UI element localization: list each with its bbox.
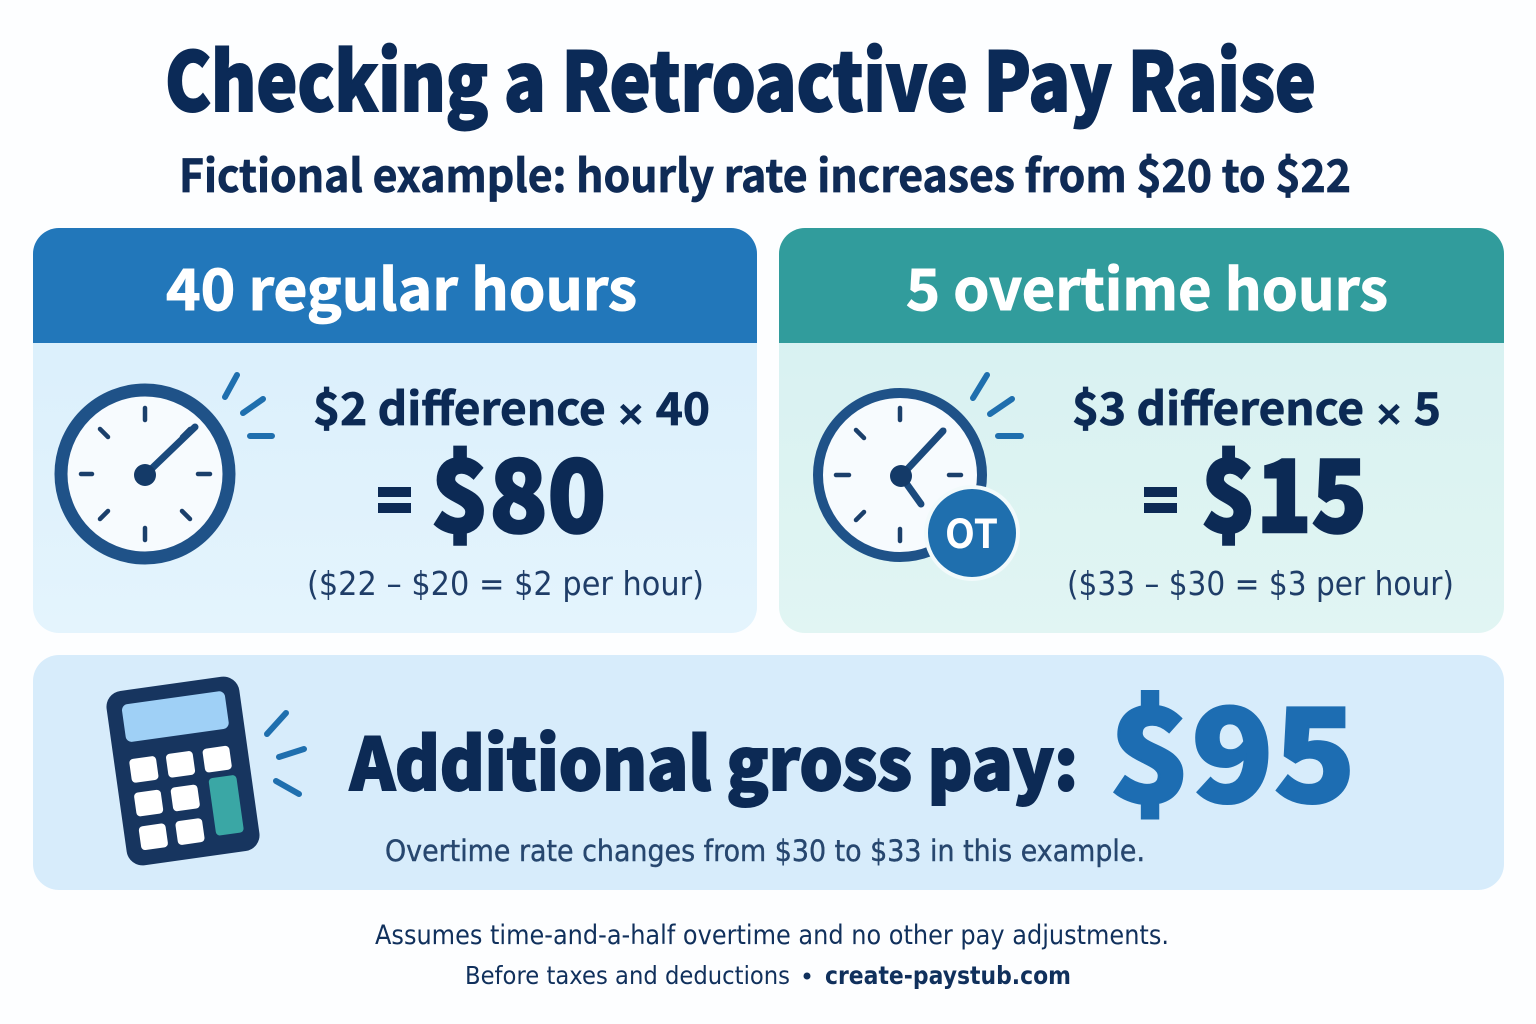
note: $33 - $30: ($33 – $30 = $3 per hour) [1067,564,1454,603]
heading: 40 regular hours: 40 regular hours [166,245,637,327]
label: additional gross pay: Additional gross pay: [349,706,1078,811]
icon: clock with OT badge [818,375,1021,579]
icon: calculator [104,675,304,867]
note: overtime rate: Overtime rate changes from $30 to $33 in this example. [385,834,1145,868]
result: $80: $80 [431,416,606,561]
footer [375,920,1169,990]
value: $95: $95 [1109,652,1356,840]
panel: regular hours [33,228,757,633]
note: $22 - $20: ($22 – $20 = $2 per hour) [307,564,704,603]
subtitle: Fictional example: hourly rate increases from $20 to $22 [179,140,1351,205]
heading: 5 overtime hours: 5 overtime hours [906,245,1388,327]
result: $15: $15 [1201,416,1367,561]
footer site: create-paystub.com [825,961,1071,990]
icon: clock [61,375,272,558]
panel header: overtime hours [779,228,1504,343]
result: equals sign [378,487,411,513]
panel header: regular hours [33,228,757,343]
title: Checking a Retroactive Pay Raise [165,18,1316,135]
footer line 2: Before taxes and deductions [465,961,790,990]
panel: additional gross pay [33,652,1504,890]
panel: overtime hours [779,228,1504,633]
footer line 1: Assumes time-and-a-half overtime and no other pay adjustments. [375,920,1169,951]
calculation: $2 difference x 40: $2 difference × 40 [313,373,710,438]
result: equals sign [1144,487,1177,513]
calculation: $3 difference x 5: $3 difference × 5 [1072,373,1441,438]
icon: clock with OT badge: OT [945,502,998,560]
footer bullet [804,972,810,980]
